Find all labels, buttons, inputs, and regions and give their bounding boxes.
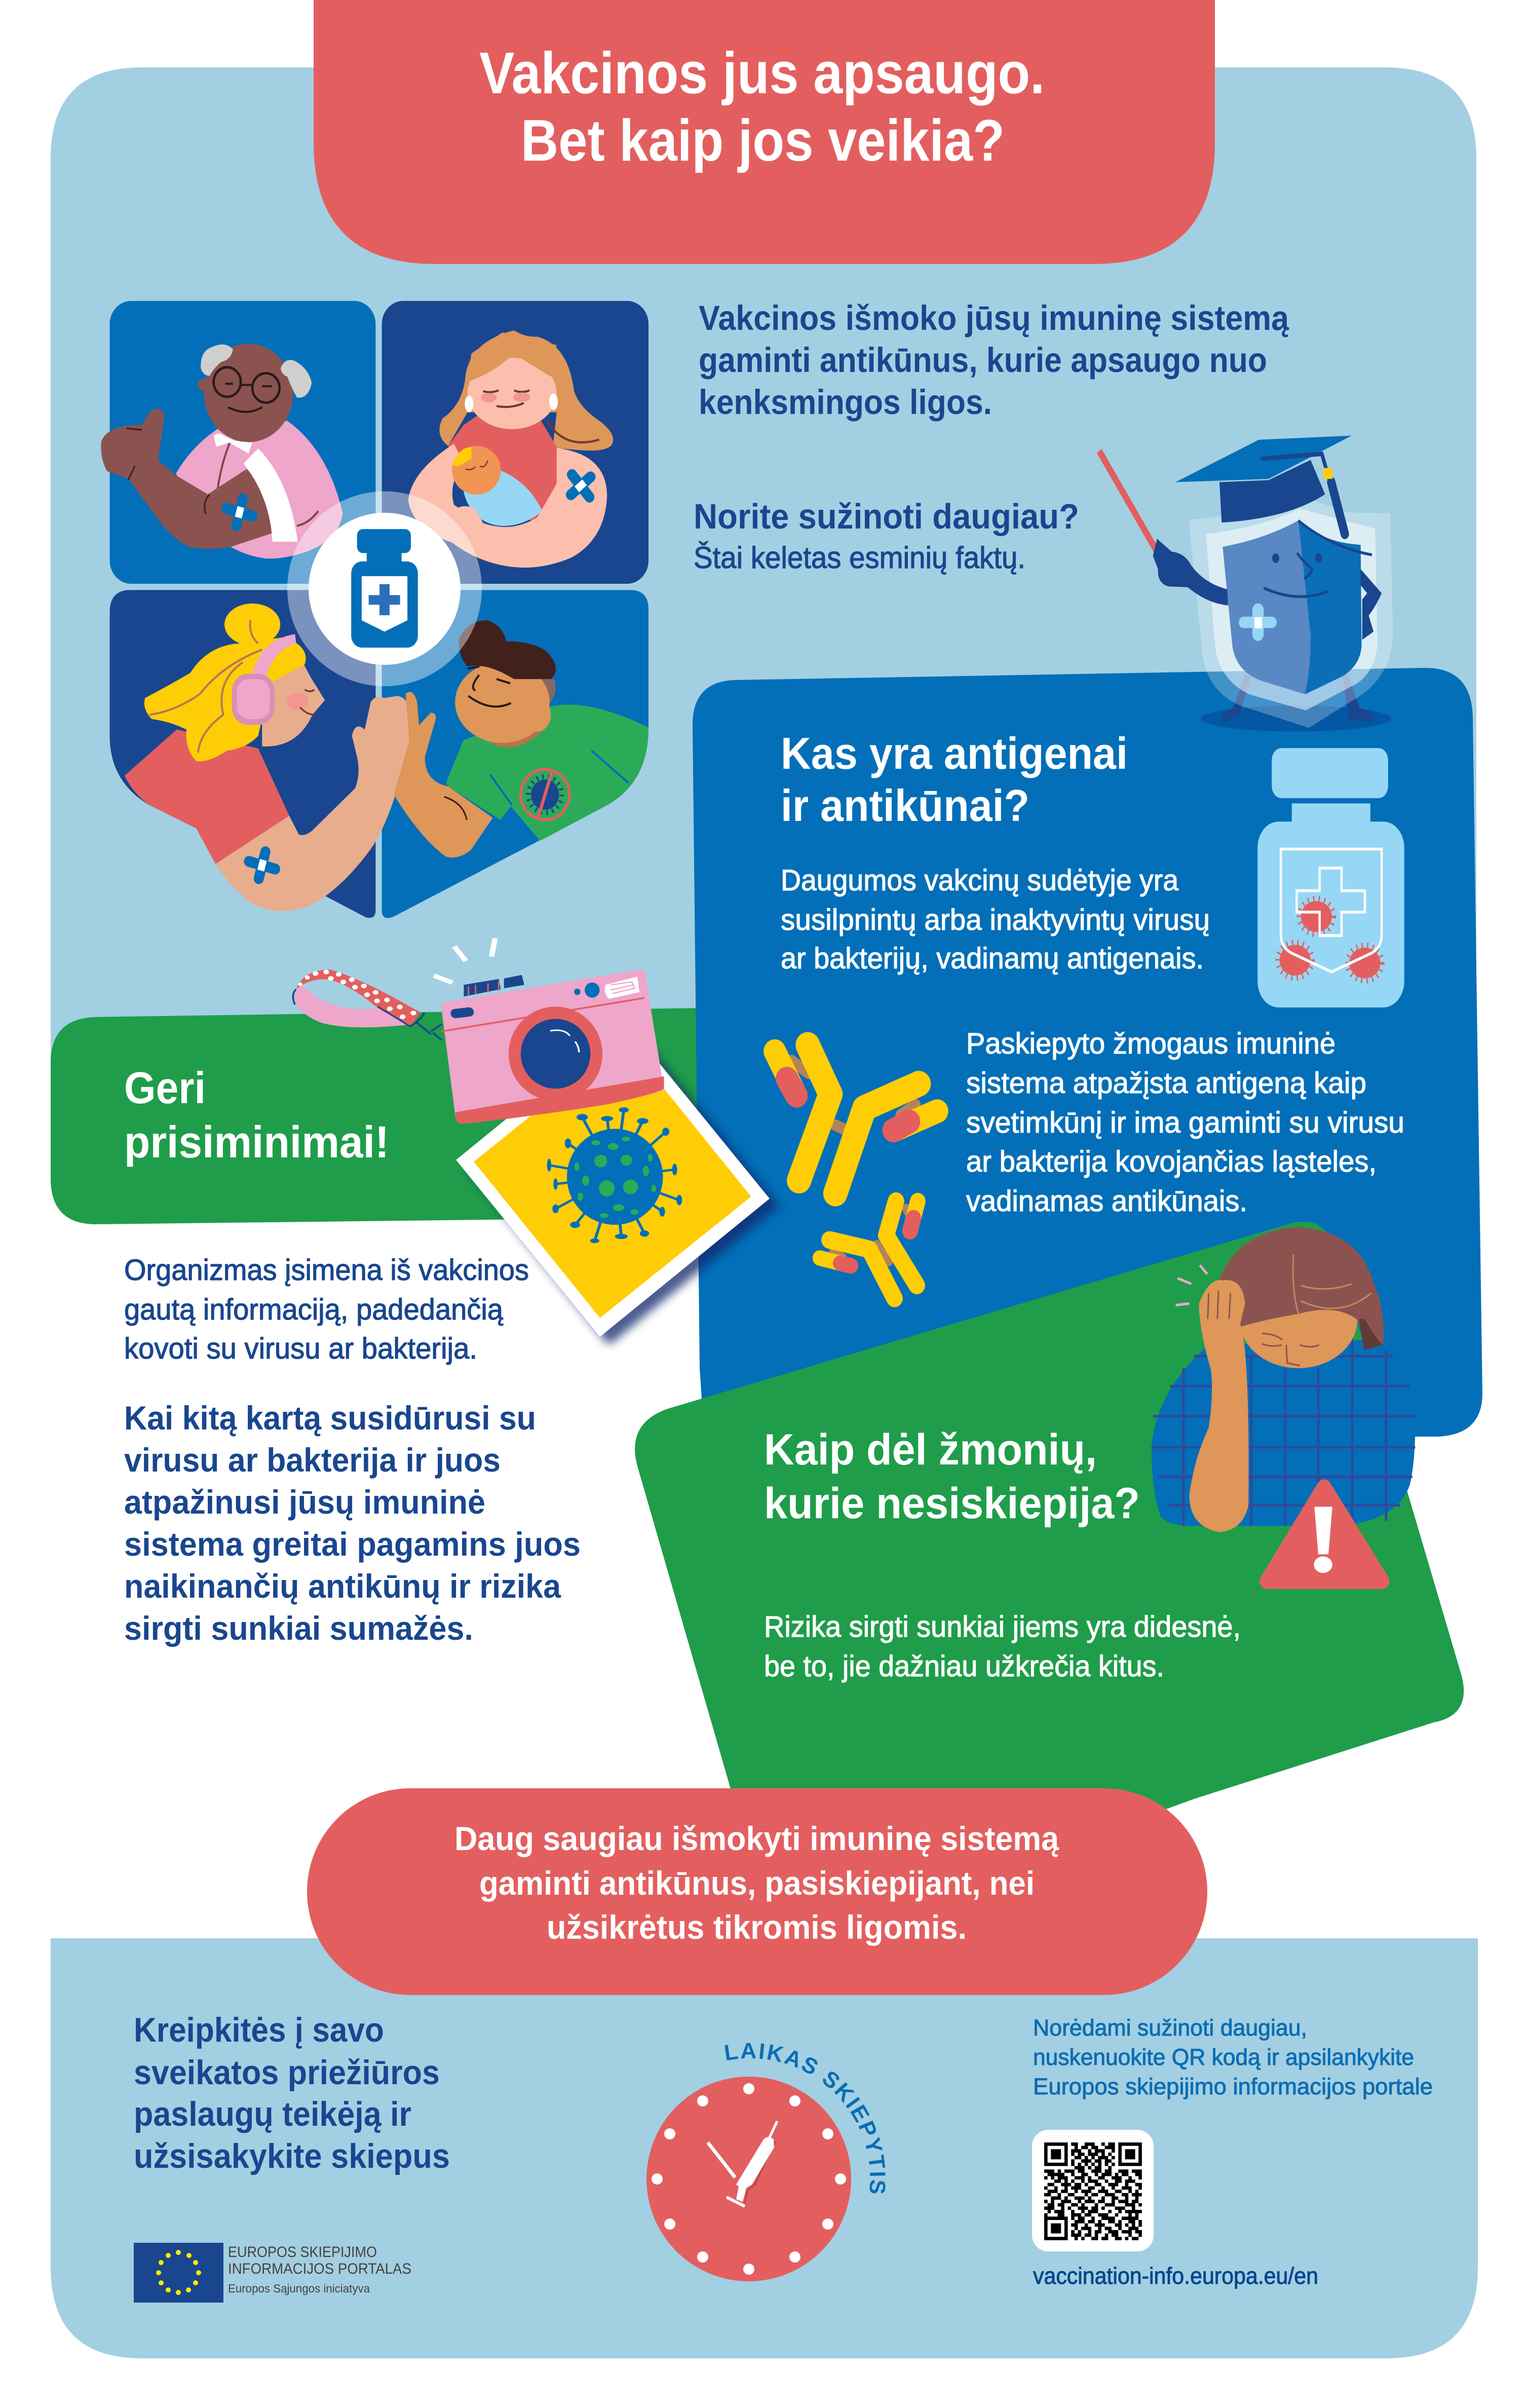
text: antibodies explanation xyxy=(966,1027,1404,1218)
callout text: Daug saugiau išmokyti imuninę sistemą xyxy=(454,1820,1059,1857)
arms xyxy=(1153,539,1382,639)
heading: antigens and antibodies: Kas yra antigenai xyxy=(781,728,1128,778)
syringe hand xyxy=(727,2121,777,2206)
shield quadrant top right xyxy=(382,301,648,584)
person: young man in green shirt xyxy=(394,620,648,857)
panel: what about unvaccinated people xyxy=(635,1222,1464,1865)
character: shield teacher with graduation cap xyxy=(1099,436,1393,732)
photo yellow area xyxy=(474,1040,751,1318)
text: contact your provider: sveikatos priežiūros xyxy=(134,2053,440,2092)
text: antigens explanation: ar bakterijų, vadinamų antigenais. xyxy=(781,942,1204,975)
text: contact your provider: Kreipkitės į savo xyxy=(134,2011,384,2049)
shield quadrant bottom right xyxy=(382,590,648,918)
title text xyxy=(479,40,1045,173)
text: unvaccinated risk xyxy=(764,1610,1241,1683)
text: antigens explanation xyxy=(781,864,1210,975)
text: contact your provider: užsisakykite skiepus xyxy=(134,2137,450,2175)
green band: good memories xyxy=(51,1008,709,1224)
text: antigens explanation: susilpnintų arba inaktyvintų virusų xyxy=(781,904,1210,936)
subheading: learn more: Norite sužinoti daugiau? xyxy=(694,497,1079,536)
warning triangle xyxy=(1267,1487,1382,1581)
photo shadow xyxy=(467,1030,780,1345)
text: unvaccinated risk: Rizika sirgti sunkiai jiems yra didesnė, xyxy=(764,1610,1241,1643)
text: next time bold paragraph: Kai kitą kartą susidūrusi su xyxy=(124,1399,536,1437)
text: portal name: Europos Sąjungos iniciatyva xyxy=(228,2282,370,2295)
callout text: gaminti antikūnus, pasiskiepijant, nei xyxy=(479,1864,1035,1902)
callout text: užsikrėtus tikromis ligomis. xyxy=(547,1908,967,1946)
heading: good memories: Geri xyxy=(124,1063,206,1113)
pointer stick xyxy=(1099,451,1159,556)
text: portal name xyxy=(228,2244,411,2295)
text: next time bold paragraph: atpažinusi jūsų imuninė xyxy=(124,1483,485,1521)
arm and hand xyxy=(1189,1280,1249,1532)
text: body remembers: Organizmas įsimena iš vakcinos xyxy=(124,1254,529,1287)
clock minute hand xyxy=(708,2142,735,2177)
panel: antigens and antibodies xyxy=(693,668,1482,1437)
camera body xyxy=(441,970,664,1124)
callout text xyxy=(454,1820,1059,1946)
title text: Bet kaip jos veikia? xyxy=(521,107,1005,173)
logo: EU flag xyxy=(134,2243,223,2303)
heading: good memories: prisiminimai! xyxy=(124,1117,389,1167)
heading: antigens and antibodies: ir antikūnai? xyxy=(781,780,1029,831)
clock with syringe hand xyxy=(646,2077,851,2281)
title banner xyxy=(314,0,1215,264)
person: girl with headphones xyxy=(125,604,409,911)
subheading: learn more: Štai keletas esminių faktų. xyxy=(694,541,1025,575)
text: antigens explanation: Daugumos vakcinų sudėtyje yra xyxy=(781,864,1179,897)
virus red right xyxy=(1347,945,1382,981)
intro text: kenksmingos ligos. xyxy=(699,383,992,422)
text: antibodies explanation: ar bakterija kovojančias ląsteles, xyxy=(966,1145,1377,1178)
hair xyxy=(1213,1227,1384,1345)
text: next time bold paragraph: sistema greitai pagamins juos xyxy=(124,1525,581,1563)
curved text: time to vaccinate: LAIKAS SKIEPYTIS xyxy=(724,2043,886,2193)
title text: Vakcinos jus apsaugo. xyxy=(479,40,1045,106)
photo frame xyxy=(456,1022,770,1337)
shadow under shield xyxy=(1201,705,1391,732)
shield halo inner xyxy=(1206,508,1378,710)
shield body xyxy=(1223,520,1372,694)
callout pill: safer to train immune system xyxy=(307,1788,1207,1995)
pain marks xyxy=(1176,1265,1207,1305)
virus red left xyxy=(1278,943,1313,978)
QR code xyxy=(1032,2130,1154,2251)
text: next time bold paragraph: sirgti sunkiai sumažės. xyxy=(124,1609,473,1647)
intro text xyxy=(699,298,1289,422)
panel: light blue upper background xyxy=(51,67,1476,1064)
heading: antigens and antibodies xyxy=(781,728,1128,831)
shield quadrant top left xyxy=(110,301,375,584)
text: next time bold paragraph: naikinančių antikūnų ir rizika xyxy=(124,1567,561,1605)
intro text: Vakcinos išmoko jūsų imuninę sistemą xyxy=(699,298,1289,337)
text: antibodies explanation: vadinamas antikūnais. xyxy=(966,1185,1247,1218)
text: portal name: INFORMACIJOS PORTALAS xyxy=(228,2261,411,2277)
person: mother with baby xyxy=(408,330,613,568)
graduation cap xyxy=(1175,436,1352,534)
shirt xyxy=(1152,1335,1416,1526)
heading: unvaccinated xyxy=(764,1425,1140,1528)
heading: unvaccinated: Kaip dėl žmonių, xyxy=(764,1425,1097,1474)
text: scan QR for more xyxy=(1033,2015,1433,2099)
person: grandfather xyxy=(101,344,342,558)
text: unvaccinated risk: be to, jie dažniau užkrečia kitus. xyxy=(764,1650,1164,1683)
virus red centre xyxy=(1299,899,1334,934)
text: antibodies explanation: Paskiepyto žmogaus imuninė xyxy=(966,1027,1335,1060)
camera flash rays xyxy=(434,938,495,983)
camera strap xyxy=(293,969,442,1040)
intro text: gaminti antikūnus, kurie apsaugo nuo xyxy=(699,341,1267,380)
hour dots xyxy=(652,2083,846,2275)
legs xyxy=(1221,670,1373,722)
text: scan QR for more: nuskenuokite QR kodą ir apsilankykite xyxy=(1033,2044,1414,2070)
text: contact your provider: paslaugų teikėją ir xyxy=(134,2095,411,2133)
icon: vial with viruses xyxy=(1257,748,1404,1007)
text: body remembers xyxy=(124,1254,529,1365)
panel: light blue footer background xyxy=(51,1938,1478,2358)
shield halo outer xyxy=(1189,498,1393,728)
person: woman with headache xyxy=(1152,1227,1416,1581)
text: next time bold paragraph: virusu ar bakterija ir juos xyxy=(124,1441,501,1479)
heading: unvaccinated: kurie nesiskiepija? xyxy=(764,1479,1140,1528)
central badge with vial icon xyxy=(287,492,482,686)
illustration: camera and virus photo xyxy=(293,938,780,1345)
text: scan QR for more: Europos skiepijimo informacijos portale xyxy=(1033,2074,1433,2099)
shield quadrant bottom left xyxy=(110,590,375,918)
text: scan QR for more: Norėdami sužinoti daugiau, xyxy=(1033,2015,1307,2041)
text: next time bold paragraph xyxy=(124,1399,581,1647)
text: contact your provider xyxy=(134,2011,450,2175)
text: body remembers: kovoti su virusu ar bakterija. xyxy=(124,1332,477,1365)
illustration: vaccinated people in a shield xyxy=(101,301,648,918)
text: portal name: EUROPOS SKIEPIJIMO xyxy=(228,2244,377,2261)
icon: antibodies xyxy=(775,1045,937,1298)
text: antibodies explanation: svetimkūnį ir ima gaminti su virusu xyxy=(966,1106,1404,1139)
subheading: learn more xyxy=(694,497,1079,575)
link: portal URL: vaccination-info.europa.eu/en xyxy=(1033,2263,1318,2289)
head xyxy=(1239,1270,1358,1368)
text: antibodies explanation: sistema atpažįsta antigeną kaip xyxy=(966,1067,1366,1100)
virus xyxy=(547,1107,682,1243)
heading: good memories xyxy=(124,1063,389,1167)
text: body remembers: gautą informaciją, padedančią xyxy=(124,1293,504,1326)
